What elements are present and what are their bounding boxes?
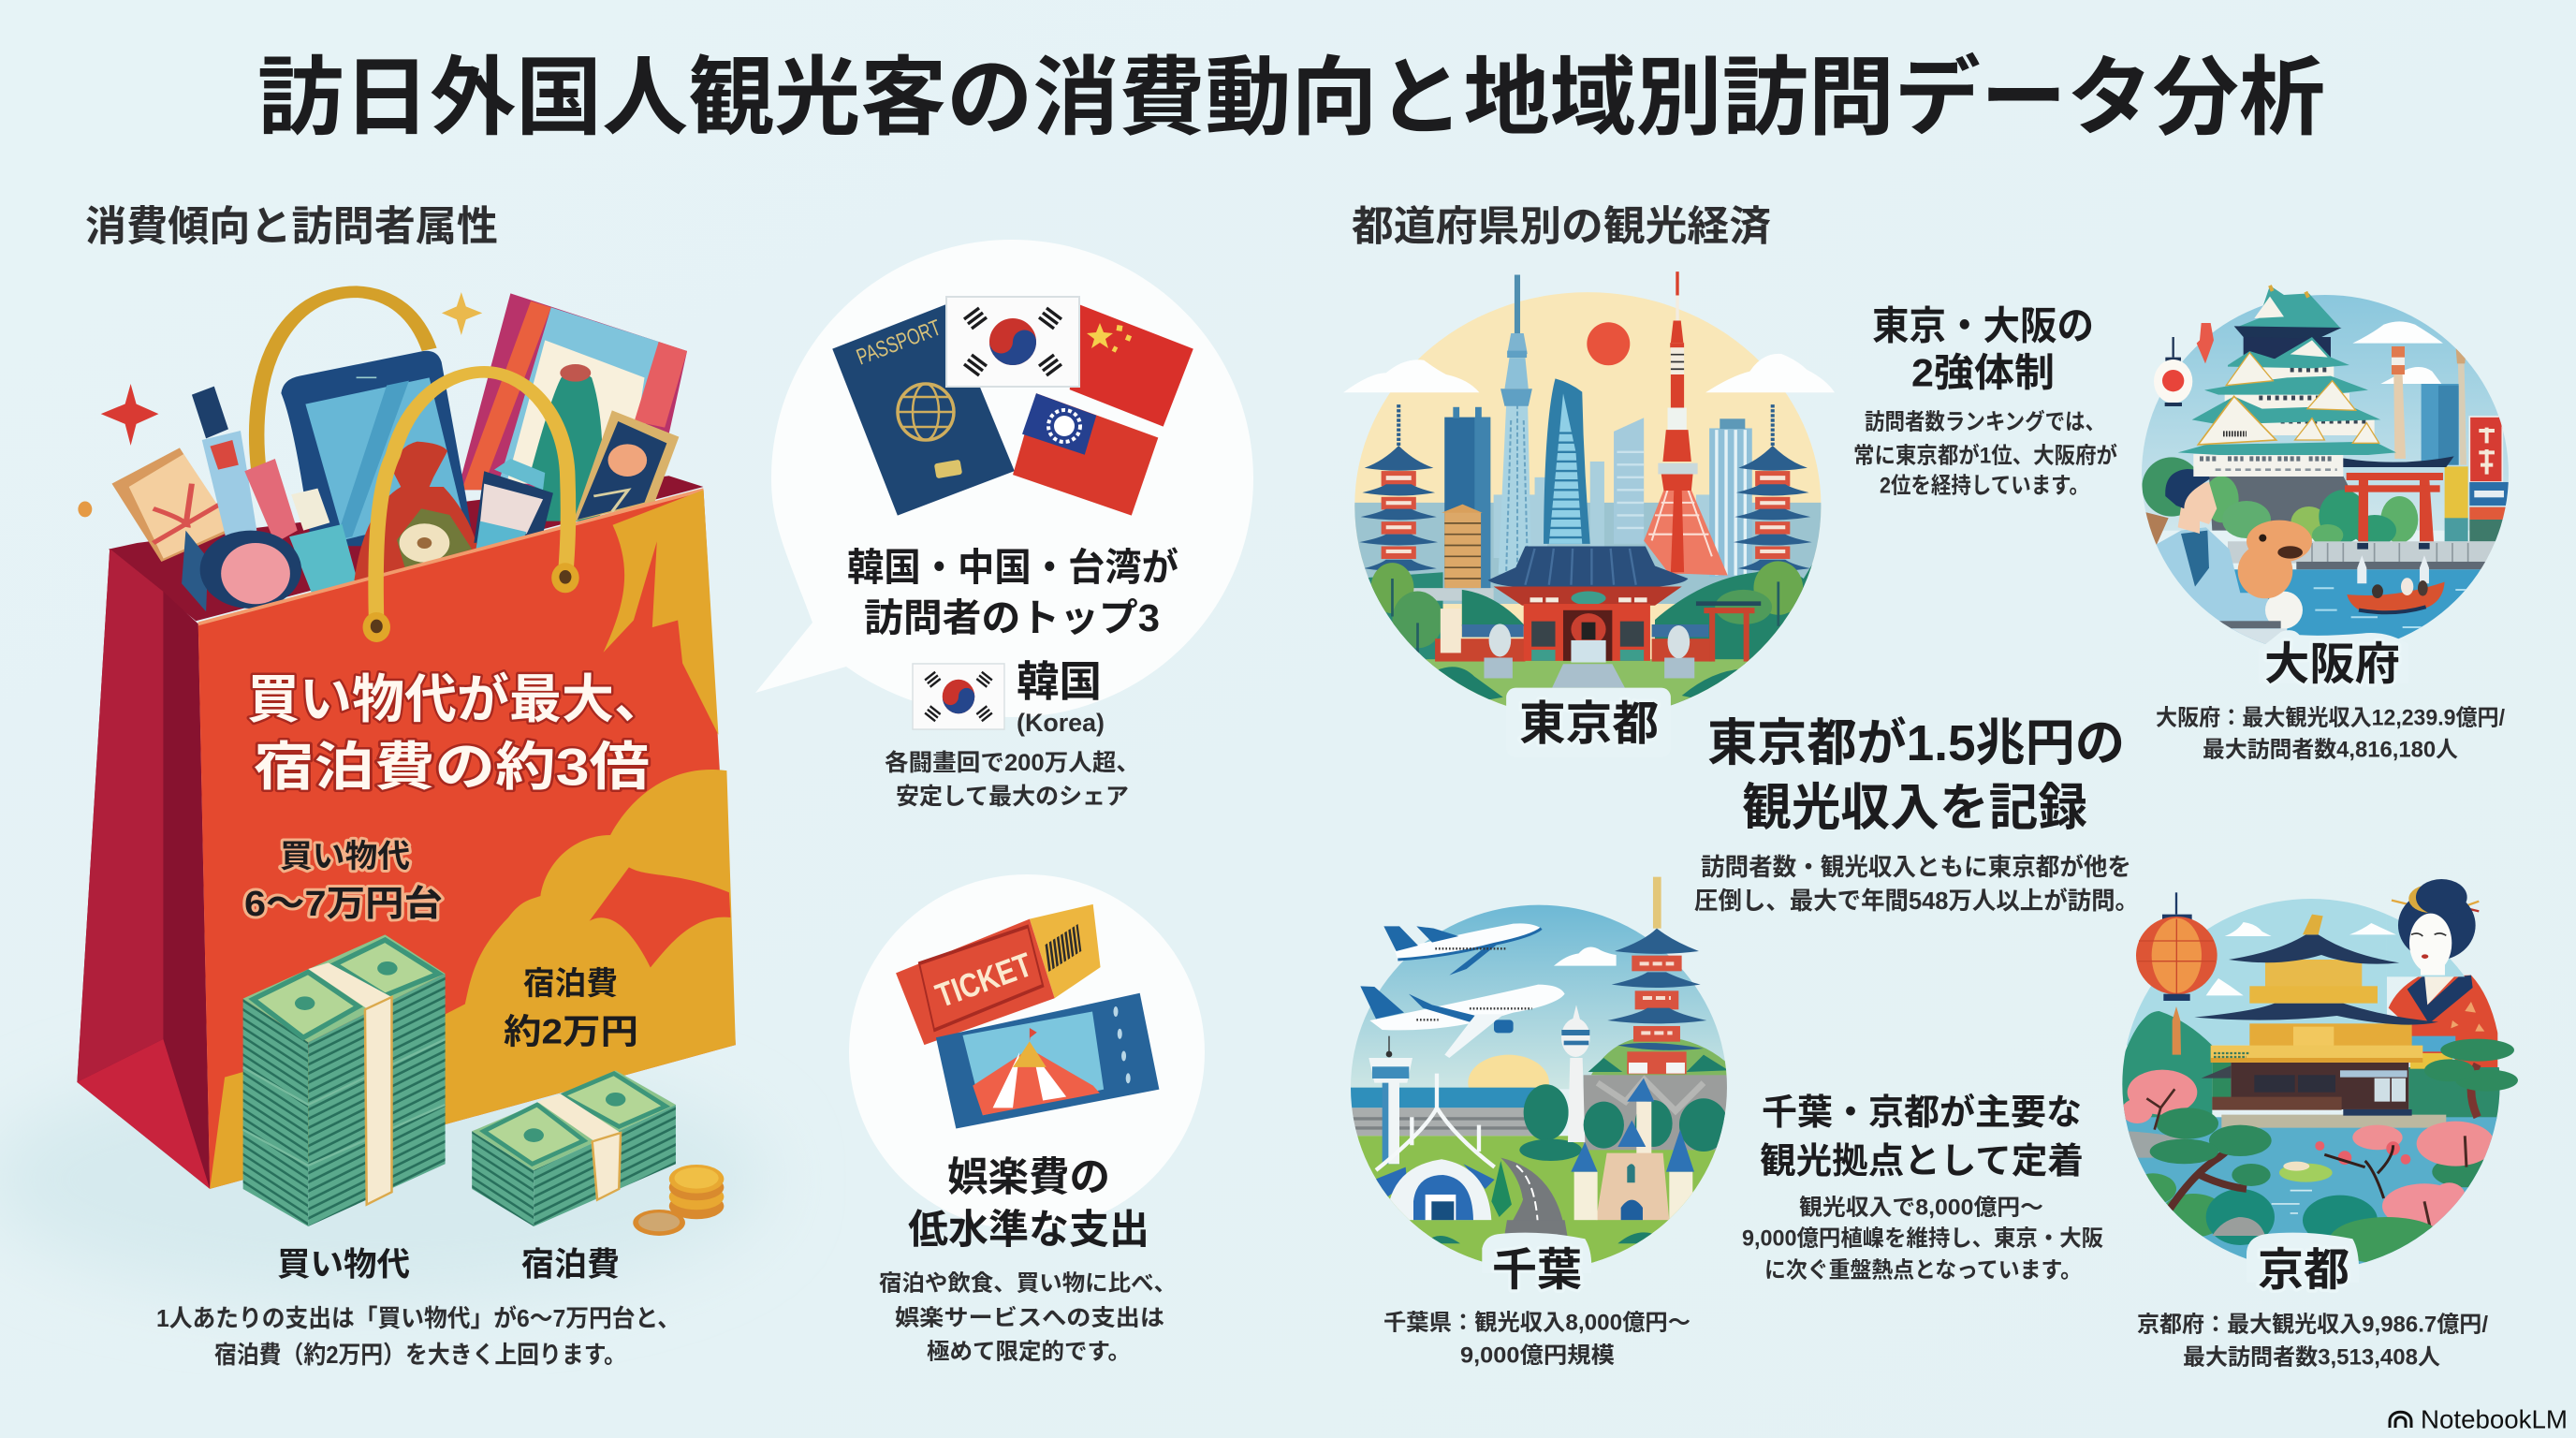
bubble heading [847,546,1178,639]
torii gate [2333,456,2454,550]
Korea note [885,750,1140,810]
bag headline: 宿泊費の約3倍 [254,738,650,796]
soft shadow behind bag [0,1058,768,1301]
paper lantern [2154,323,2214,406]
small clouds [2206,922,2396,995]
body: に次ぐ重盤熱点となっています。 [1764,1258,2082,1283]
tower tops [1500,271,1684,407]
Korea label [1017,657,1105,737]
Osaka stats: 大阪府：最大観光収入12,239.9億円/ [2156,706,2505,730]
body: 訪問者数ランキングでは、 [1865,408,2105,434]
stack label: shopping: 買い物代 [277,1247,410,1283]
spending note [156,1304,681,1369]
Kyoto stats: 京都府：最大観光収入9,986.7億円/ [2137,1313,2488,1337]
entertainment heading [908,1155,1149,1253]
panel: entertainment spending [849,874,1205,1365]
panel: Kyoto [2106,879,2518,1371]
label patch [2259,630,2408,683]
stack of bills: shopping [243,934,446,1226]
panel: Chiba [1339,871,1741,1369]
spending note: 宿泊費（約2万円）を大きく上回ります。 [214,1341,626,1369]
panel: Tokyo [1339,262,1835,758]
speech bubble [755,240,1253,717]
label: Osaka: 大阪府 [2264,640,2400,689]
panel: shopping bag [77,292,736,1369]
panel: Tokyo-Osaka duopoly text [1853,303,2117,498]
shopping amount [244,839,443,924]
Korea note: 各闘畫回で200万人超、 [885,750,1140,776]
body: 2位を経持しています。 [1880,474,2089,498]
Osaka stats [2156,706,2505,762]
coins [633,1165,724,1236]
entertainment heading: 低水準な支出 [908,1208,1149,1253]
castle [2178,286,2396,477]
body: 観光収入で8,000億円〜 [1799,1195,2043,1221]
label: Tokyo: 東京都 [1519,697,1659,750]
body: 訪問者数・観光収入ともに東京都が他を [1701,853,2131,881]
spending note: 1人あたりの支出は「買い物代」が6〜7万円台と、 [156,1304,681,1332]
heading [1872,303,2094,395]
panel: Tokyo 1.5 trillion text [1694,715,2139,915]
heading: 2強体制 [1911,350,2055,395]
heading [1707,715,2125,836]
stack of bills: lodging [472,1070,676,1226]
panel: top visitor countries [755,240,1253,810]
label: Chiba: 千葉 [1492,1245,1582,1296]
pine [2424,1039,2518,1117]
heading: 東京・大阪の [1872,303,2094,348]
Korea label: 韓国 [1017,657,1102,706]
lantern [2136,892,2217,1055]
clouds [1343,354,1835,392]
bag handle front [363,372,579,642]
heading: spending and visitors: 消費傾向と訪問者属性 [85,204,498,249]
stack label: lodging: 宿泊費 [521,1247,620,1283]
lodging amount: 約2万円 [504,1013,638,1050]
label: Kyoto: 京都 [2258,1245,2349,1296]
label patch [1506,688,1671,757]
pagoda [1607,877,1706,1074]
Korea mini flag [913,664,1004,729]
body: 常に東京都が1位、大阪府が [1853,442,2117,468]
illustration: Osaka castle [2142,285,2509,644]
label patch [1482,1233,1591,1273]
bubble heading: 訪問者のトップ3 [864,596,1160,639]
lodging amount [504,966,638,1050]
NotebookLM credit: NotebookLM [2421,1404,2568,1434]
bubble heading: 韓国・中国・台湾が [847,546,1178,589]
Chiba stats: 千葉県：観光収入8,000億円〜 [1383,1311,1690,1335]
illustration: Tokyo skyline [1344,271,1835,706]
heading: 観光収入を記録 [1742,780,2087,836]
bag body [77,490,736,1189]
sparkles [78,292,482,517]
body [1742,1195,2103,1283]
Osaka stats: 最大訪問者数4,816,180人 [2203,738,2458,762]
entertainment note [879,1271,1177,1365]
pavilion [2194,915,2438,1116]
Kyoto stats: 最大訪問者数3,513,408人 [2183,1344,2440,1371]
body [1853,408,2117,498]
illustration: Chiba airport and castle [1351,876,1727,1263]
heading: prefecture tourism economy: 都道府県別の観光経済 [1352,204,1771,249]
airplanes [1360,923,1565,1058]
entertainment note: 娯楽サービスへの支出は [895,1305,1164,1331]
panel: Osaka [2125,281,2527,762]
Chiba stats [1383,1311,1690,1369]
bag contents [109,292,703,621]
cloud [1554,947,1617,966]
illustration: Kyoto golden pavilion [2106,879,2518,1283]
heading: 東京都が1.5兆円の [1707,715,2125,771]
Chiba stats: 9,000億円規模 [1460,1343,1615,1369]
panel: Chiba-Kyoto text [1742,1093,2103,1283]
Kyoto stats [2137,1313,2488,1371]
Korea label: (Korea) [1017,709,1105,737]
kimono [2389,974,2497,1077]
geisha [2392,879,2479,976]
bag headline [247,670,666,796]
tickets [896,904,1159,1129]
heading [1760,1093,2084,1181]
entertainment note: 極めて限定的です。 [927,1339,1131,1365]
entertainment note: 宿泊や飲食、買い物に比べ、 [879,1271,1177,1296]
shopping amount: 買い物代 [280,839,410,874]
body [1694,853,2139,915]
red sun [1587,322,1630,365]
body: 9,000億円植嵲を維持し、東京・大阪 [1742,1226,2103,1251]
passport and flags: PASSPORT [854,315,944,370]
entertainment heading: 娯楽費の [947,1155,1110,1200]
label patch [2247,1233,2359,1283]
white circle [849,874,1205,1230]
Korea note: 安定して最大のシェア [896,784,1129,810]
body: 圧倒し、最大で年間548万人以上が訪問。 [1694,887,2139,915]
passport and flags [832,297,1193,516]
lodging amount: 宿泊費 [523,966,618,1002]
shopping amount: 6〜7万円台 [244,885,443,924]
bag headline: 買い物代が最大、 [247,670,666,728]
heading: 千葉・京都が主要な [1762,1093,2082,1133]
heading: 観光拠点として定着 [1760,1142,2084,1181]
tickets: TICKET [930,945,1037,1015]
title: 訪日外国人観光客の消費動向と地域別訪問データ分析 [257,51,2325,146]
